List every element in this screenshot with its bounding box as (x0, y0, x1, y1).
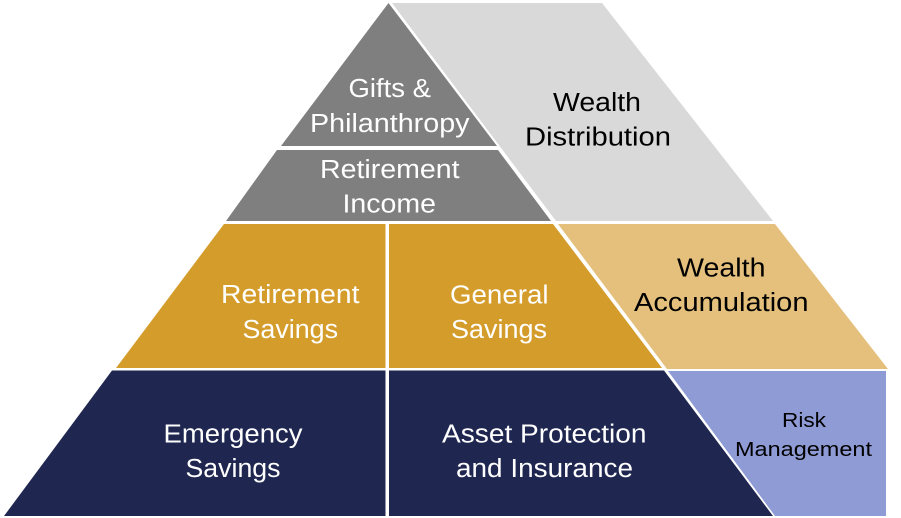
panel: retirement income: Retirement (320, 156, 460, 184)
panel: retirement savings: Retirement (221, 281, 360, 309)
panel: risk management: Management (735, 438, 872, 461)
panel: general savings: General (450, 282, 548, 310)
panel: gifts and philanthropy: Gifts & (348, 75, 431, 103)
panel: wealth distribution: Wealth (553, 89, 641, 117)
panel: asset protection and insurance: and Insurance (456, 455, 633, 483)
panel: retirement income (226, 150, 551, 221)
panel: general savings: Savings (451, 316, 547, 344)
panel: gifts and philanthropy: Philanthropy (310, 110, 470, 138)
panel: emergency savings: Emergency (164, 420, 303, 448)
panel: risk management: Risk (782, 409, 827, 432)
panel: asset protection and insurance: Asset Protection (442, 420, 646, 448)
panel: risk management (668, 371, 886, 516)
panel: wealth accumulation: Wealth (677, 254, 766, 282)
panel: wealth distribution (392, 3, 773, 221)
panel: asset protection and insurance (389, 370, 773, 516)
panel: wealth accumulation: Accumulation (634, 289, 808, 317)
panel: general savings (389, 224, 662, 368)
panel: retirement savings (116, 224, 386, 368)
panel: emergency savings: Savings (186, 455, 280, 483)
panel: gifts and philanthropy (281, 3, 497, 146)
panel: retirement savings: Savings (242, 316, 338, 344)
panel: emergency savings (4, 370, 386, 516)
panel: retirement income: Income (342, 190, 436, 218)
panel: wealth accumulation (558, 224, 888, 369)
panel: wealth distribution: Distribution (525, 124, 671, 152)
